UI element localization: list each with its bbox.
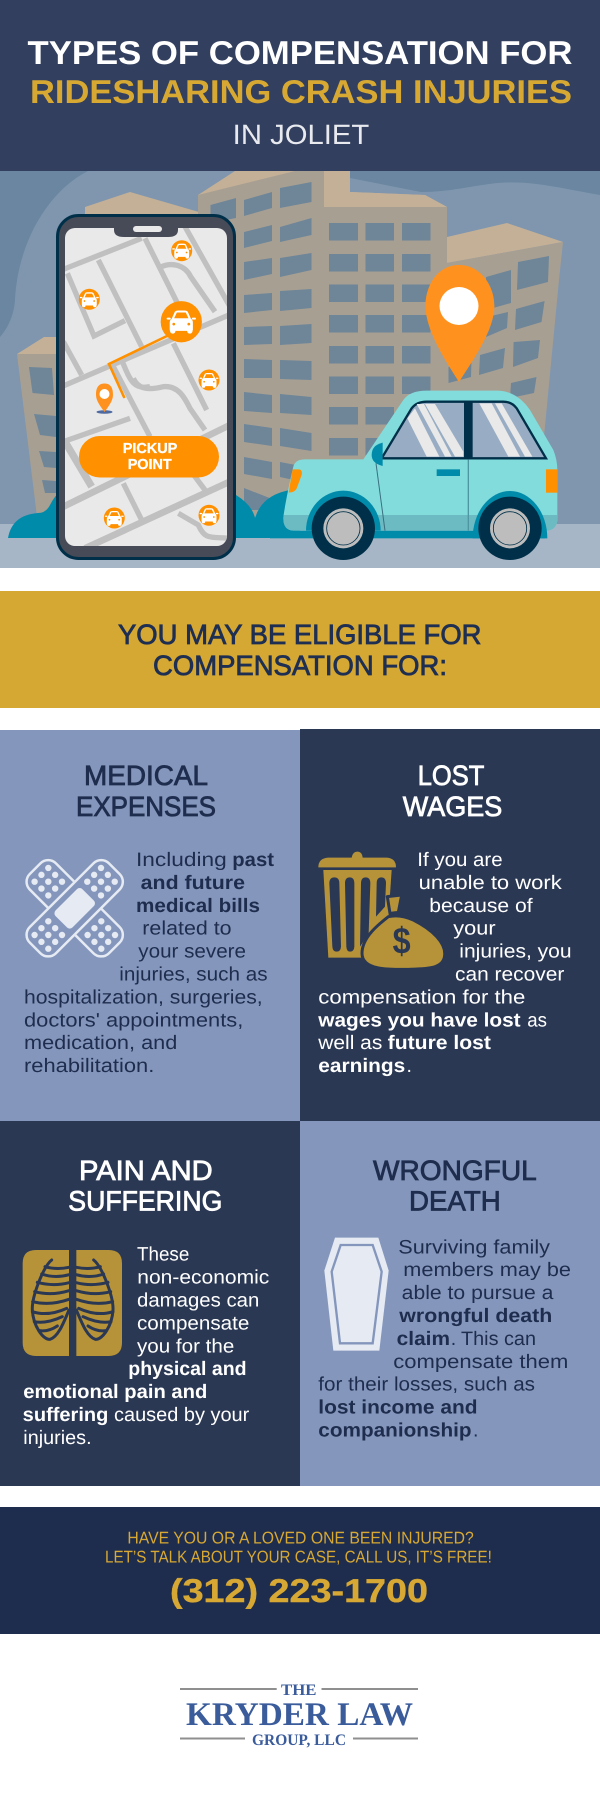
body text: lost wages: as	[527, 1009, 547, 1031]
heading: pain and suffering: SUFFERING	[68, 1186, 222, 1217]
heading: medical expenses	[76, 760, 216, 822]
body text: wrongful death: This can	[461, 1328, 536, 1350]
body text: lost wages: because of	[429, 895, 533, 917]
body text: lost wages: future lost	[388, 1032, 492, 1054]
body text: wrongful death	[318, 1236, 571, 1442]
body text: wrongful death: Surviving family	[398, 1236, 550, 1258]
body text: pain and suffering: you for the	[137, 1335, 234, 1357]
building: right	[447, 223, 563, 434]
call to action text: LET’S TALK ABOUT YOUR CASE, CALL US, IT’S FREE!	[105, 1547, 492, 1566]
panel: wrongful death	[300, 1121, 600, 1486]
panel: pain and suffering	[0, 1121, 300, 1486]
panel: lost wages	[300, 729, 600, 1121]
car marker: top	[171, 240, 192, 261]
body text: pain and suffering: compensate	[137, 1312, 249, 1334]
phone speaker	[133, 226, 162, 232]
body text: wrongful death: for their losses, such as	[318, 1374, 535, 1396]
heading: medical expenses: EXPENSES	[76, 791, 216, 822]
body text: lost wages: can recover	[455, 964, 565, 986]
body text: wrongful death: able to pursue a	[402, 1282, 554, 1304]
body text: wrongful death: lost income and	[318, 1397, 478, 1419]
body text: lost wages: compensation for the	[318, 986, 525, 1008]
body text: lost wages: well as	[317, 1032, 383, 1054]
building: left small	[17, 337, 56, 514]
car marker: left	[79, 289, 100, 310]
heading: wrongful death: WRONGFUL	[373, 1155, 537, 1186]
phone notch	[114, 228, 178, 237]
eligibility banner: YOU MAY BE ELIGIBLE FOR	[118, 619, 482, 650]
heading: lost wages	[403, 760, 502, 822]
pickup point button: POINT	[128, 457, 172, 473]
body text: pain and suffering	[23, 1244, 270, 1449]
title line: types of compensation: TYPES OF COMPENSATION FOR	[28, 34, 573, 71]
body text: medical expenses: medical bills	[136, 895, 260, 917]
car marker: bottom left	[104, 508, 125, 528]
icon: trash can and money bag	[318, 852, 445, 969]
body text: lost wages: unable to work	[419, 872, 562, 894]
phone	[58, 216, 237, 558]
car	[270, 391, 560, 560]
body text: pain and suffering: non-economic	[137, 1267, 270, 1289]
panel: medical expenses	[0, 730, 300, 1121]
body text: medical expenses: medication, and	[24, 1032, 177, 1054]
eligibility banner	[0, 591, 600, 708]
body text: wrongful death: wrongful death	[398, 1305, 552, 1327]
header panel	[0, 0, 600, 171]
heading: lost wages: WAGES	[403, 791, 502, 822]
logo: The Kryder Law Group: KRYDER LAW	[186, 1697, 413, 1733]
heading: medical expenses: MEDICAL	[84, 760, 208, 791]
bushes	[8, 490, 300, 538]
icon: coffin	[324, 1238, 389, 1351]
body text: lost wages: wages you have lost	[317, 1009, 521, 1031]
car marker: bottom right	[198, 505, 220, 526]
route line	[109, 336, 167, 397]
body text: pain and suffering: suffering	[23, 1404, 108, 1426]
heading: pain and suffering	[68, 1155, 222, 1217]
body text: pain and suffering: physical and	[128, 1358, 247, 1380]
logo: The Kryder Law Group: GROUP, LLC	[252, 1732, 346, 1749]
body text: lost wages: If you are	[417, 849, 503, 871]
body text: pain and suffering: injuries.	[23, 1427, 92, 1449]
body text: medical expenses: Including	[136, 849, 227, 871]
call to action panel	[0, 1507, 600, 1634]
body text: pain and suffering: These	[137, 1244, 189, 1266]
body text: lost wages: your	[453, 918, 496, 940]
heading: wrongful death	[373, 1155, 537, 1217]
map roads	[60, 227, 237, 548]
body text: pain and suffering: damages can	[137, 1290, 259, 1312]
phone number: (312) 223-1700	[170, 1572, 428, 1609]
body text: pain and suffering: emotional pain and	[23, 1381, 207, 1403]
icon: crossed bandages	[22, 856, 127, 961]
car marker: right	[198, 370, 220, 390]
icon: rib cage x-ray	[23, 1250, 122, 1356]
body text: wrongful death: companionship	[318, 1420, 472, 1442]
body text: pain and suffering: caused by your	[114, 1404, 250, 1426]
title line: ridesharing crash injuries: RIDESHARING CRASH INJURIES	[30, 73, 572, 110]
call to action text	[105, 1528, 492, 1566]
body text: medical expenses: hospitalization, surgeries,	[24, 986, 263, 1008]
heading: pain and suffering: PAIN AND	[79, 1155, 213, 1186]
pickup point button: PICKUP	[123, 441, 178, 457]
illustration: city, phone map and car	[0, 171, 600, 568]
pickup point button	[79, 436, 219, 478]
heading: wrongful death: DEATH	[409, 1186, 501, 1217]
eligibility banner: COMPENSATION FOR:	[153, 650, 447, 681]
body text: medical expenses: related to	[142, 918, 232, 940]
body text: wrongful death: .	[473, 1420, 478, 1442]
body text: medical expenses: past	[232, 849, 275, 871]
body text: wrongful death: .	[451, 1328, 456, 1350]
body text: medical expenses: rehabilitation.	[24, 1055, 154, 1077]
body text: lost wages: .	[406, 1055, 412, 1077]
body text: medical expenses: your severe	[138, 941, 246, 963]
body text: medical expenses: doctors' appointments,	[24, 1009, 243, 1031]
body text: wrongful death: compensate them	[393, 1351, 568, 1373]
body text: medical expenses: injuries, such as	[119, 964, 268, 986]
building: center	[198, 171, 447, 525]
icon: trash can and money bag: $	[393, 920, 411, 961]
logo: The Kryder Law Group	[180, 1682, 418, 1749]
body text: wrongful death: members may be	[403, 1259, 571, 1281]
subtitle: in Joliet: IN JOLIET	[233, 119, 369, 150]
logo: The Kryder Law Group: THE	[281, 1682, 316, 1699]
heading: lost wages: LOST	[418, 760, 484, 791]
body text: lost wages: injuries, you	[459, 941, 572, 963]
body text: lost wages: earnings	[318, 1055, 405, 1077]
ground	[0, 524, 600, 568]
call to action text: HAVE YOU OR A LOVED ONE BEEN INJURED?	[127, 1528, 474, 1547]
body text: medical expenses: and future	[141, 872, 245, 894]
building: back left roof	[85, 192, 198, 214]
big location pin	[426, 265, 494, 382]
small location pin	[96, 384, 113, 414]
body text: medical expenses	[24, 849, 275, 1077]
body text: lost wages	[317, 849, 572, 1077]
car marker: main	[161, 301, 202, 342]
body text: wrongful death: claim	[397, 1328, 450, 1350]
